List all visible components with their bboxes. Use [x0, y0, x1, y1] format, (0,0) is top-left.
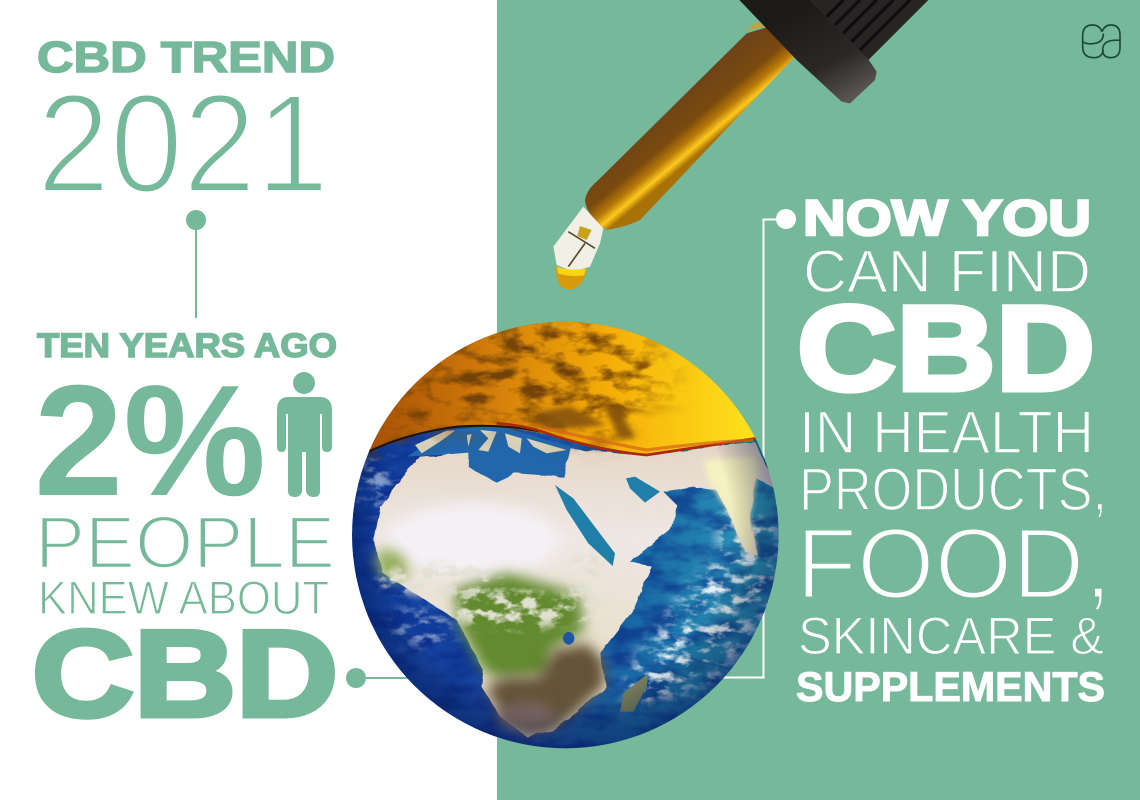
text: KNEW ABOUT: KNEW ABOUT [38, 571, 329, 624]
Persian Gulf [626, 477, 660, 503]
Madagascar [620, 673, 648, 712]
waterline ridge [368, 426, 540, 452]
Africa and Arabia landmass [373, 442, 777, 737]
connector: CBD to globe [346, 668, 411, 688]
statistic: 2%: 2% [34, 353, 266, 529]
Central Africa green [453, 573, 585, 678]
background: green right panel [497, 0, 1140, 800]
dropper cap collar [739, 0, 877, 103]
heading: CBD TREND: CBD TREND [37, 33, 335, 82]
globe clouds west ocean [360, 453, 457, 645]
dropper cap ribs [810, 0, 928, 60]
ocean deep mottling [350, 437, 783, 750]
southern tip tint [497, 703, 557, 730]
text: TEN YEARS AGO: TEN YEARS AGO [37, 327, 337, 365]
connector: right callout line [720, 209, 796, 678]
text: IN HEALTH: IN HEALTH [799, 399, 1094, 466]
oil drop [556, 266, 587, 289]
central clouds [377, 550, 607, 630]
Sahara light patch [387, 503, 560, 577]
text: CAN FIND: CAN FIND [803, 238, 1091, 305]
icon: person [277, 372, 332, 497]
text: SKINCARE &: SKINCARE & [798, 607, 1104, 666]
text: CBD right: CBD [797, 280, 1095, 416]
bulb dark lines [568, 232, 595, 267]
heading: 2021: 2021 [37, 64, 329, 222]
gold cap dark texture [353, 313, 673, 463]
Red Sea [555, 485, 615, 566]
dropper tip bulb [553, 207, 603, 272]
Southern Africa brown [485, 643, 605, 733]
waterline red bands [497, 423, 756, 455]
icon: globe with oil cap [340, 310, 790, 750]
oil inside bulb [577, 226, 592, 240]
connector: 2021 to ten years ago [186, 210, 206, 318]
oil drop highlight [557, 267, 586, 276]
Lake Victoria [563, 632, 574, 645]
background: white left [0, 0, 497, 800]
text: NOW YOU: NOW YOU [803, 190, 1091, 246]
India tint [703, 457, 757, 555]
Europe strip [415, 430, 567, 453]
dropper glass tube [585, 27, 795, 230]
globe clouds east ocean [623, 503, 780, 710]
icon: oil dropper [553, 0, 928, 289]
gold cap dark land shapes [540, 402, 635, 438]
Sahel green west [369, 543, 414, 587]
text: PEOPLE: PEOPLE [35, 501, 335, 584]
globe ocean [352, 322, 779, 748]
text: CBD left: CBD [32, 606, 338, 743]
gold oil cap [369, 322, 756, 454]
Mediterranean [407, 425, 570, 485]
icon: logo [1083, 25, 1120, 58]
globe edge shading [352, 418, 778, 748]
text: FOOD,: FOOD, [796, 508, 1112, 620]
dropper thread [746, 22, 765, 31]
text: SUPPLEMENTS: SUPPLEMENTS [796, 663, 1105, 710]
